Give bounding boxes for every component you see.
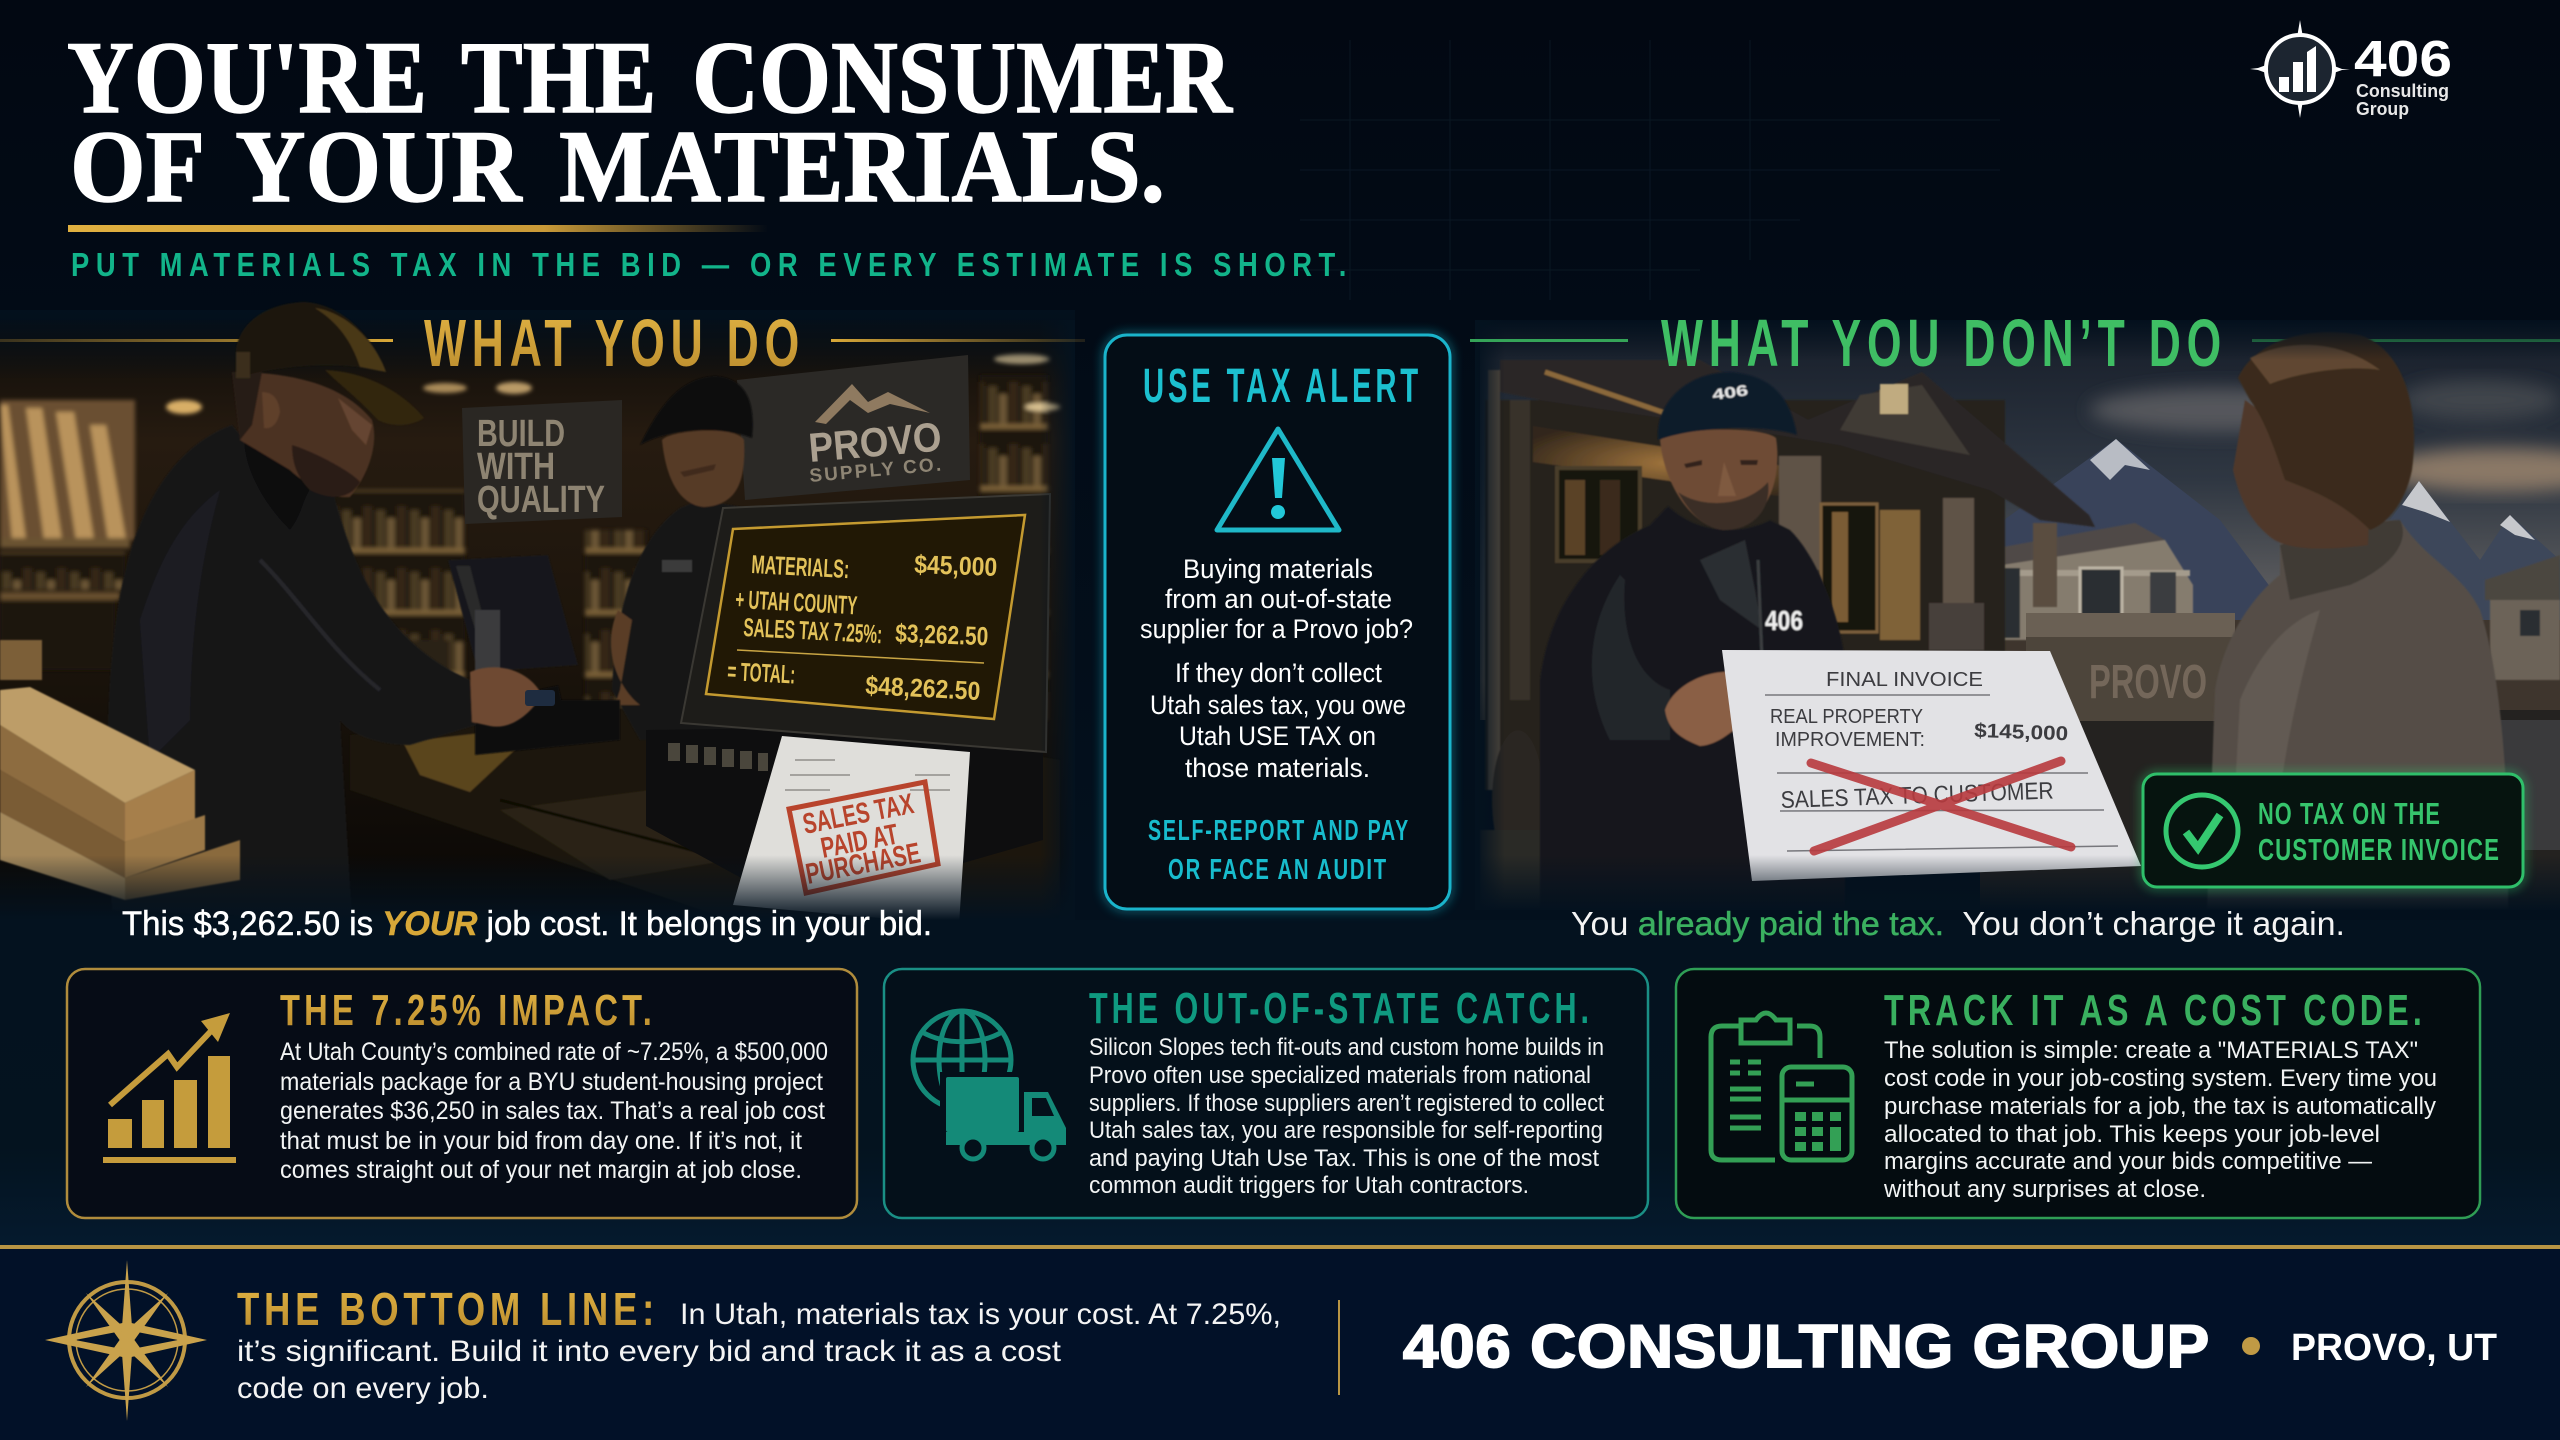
title: YOU'RE THE CONSUMER [67, 21, 1233, 135]
photo edge fades [1475, 320, 2560, 910]
sign: build with quality: BUILD [477, 413, 565, 455]
icon: gold compass [45, 1260, 207, 1421]
final invoice sheet: $145,000 [1974, 720, 2069, 745]
receipt with stamp [733, 736, 970, 925]
top fade and section rule behind figures [0, 320, 1058, 366]
panel: the out-of-state catch: THE OUT-OF-STATE CATCH. [1089, 984, 1593, 1033]
pos monitor with sales tax total: $3,262.50 [895, 618, 989, 651]
sign: provo supply co.: SUPPLY CO. [809, 455, 942, 487]
title: OF YOUR MATERIALS. [70, 110, 1165, 224]
alert body text: If they don’t collect [1175, 658, 1382, 688]
pos monitor with sales tax total: $48,262.50 [865, 670, 981, 706]
receipt with stamp: PAID AT [818, 819, 901, 865]
pos monitor with sales tax total: = TOTAL: [727, 656, 796, 690]
alert heading: USE TAX ALERT [1143, 360, 1422, 413]
red strike-through X [1811, 761, 2071, 851]
callout: no tax on the customer invoice [2143, 774, 2523, 887]
counter [350, 708, 1056, 889]
customer seen from behind [2207, 332, 2508, 910]
footer band [0, 1245, 2560, 1440]
receipt with stamp: SALES TAX [800, 788, 917, 841]
panel: use tax alert [1105, 335, 1450, 909]
logo: 406 Consulting Group [2250, 20, 2452, 119]
alert body text: Utah sales tax, you owe [1150, 690, 1406, 720]
section rule behind customer [2252, 339, 2560, 342]
bottom line text [237, 1283, 1281, 1405]
sign: build with quality: WITH [477, 446, 555, 488]
final invoice sheet: REAL PROPERTY [1770, 706, 1923, 728]
panel: the 7.25% impact: THE 7.25% IMPACT. [280, 986, 656, 1035]
final invoice sheet: IMPROVEMENT: [1775, 729, 1925, 751]
final invoice sheet [1722, 650, 2141, 881]
body text: common audit triggers for Utah contractors. [1089, 1172, 1529, 1199]
caption: what you don't do: You already paid the tax. You don’t charge it again. [1571, 905, 2345, 942]
logo: 406 Consulting Group: 406 [2354, 30, 2452, 87]
panel: track it as a cost code [1676, 969, 2480, 1218]
logo: 406 Consulting Group: Consulting [2356, 81, 2449, 101]
body text: that must be in your bid from day one. If it’s not, it [280, 1127, 802, 1155]
bottom line text: In Utah, materials tax is your cost. At 7.25%, [680, 1298, 1281, 1331]
panel: what you don't do (home delivery photo illustration) [1475, 320, 2560, 910]
cashier [610, 376, 754, 740]
body text: comes straight out of your net margin at job close. [280, 1156, 802, 1184]
contractor handing over invoice [1540, 372, 1845, 910]
body text: generates $36,250 in sales tax. That’s a real job cost [280, 1097, 825, 1125]
body text [1883, 1037, 2437, 1203]
body text: cost code in your job-costing system. Every time you [1884, 1065, 2437, 1092]
body text [1089, 1034, 1604, 1199]
alert call to action: OR FACE AN AUDIT [1168, 854, 1388, 886]
title [67, 21, 1233, 224]
gold rule under title [68, 225, 768, 232]
bottom line text: THE BOTTOM LINE: [237, 1283, 659, 1335]
alert body text: supplier for a Provo job? [1140, 614, 1413, 644]
body text: purchase materials for a job, the tax is automatically [1884, 1093, 2436, 1120]
body text: The solution is simple: create a "MATERIALS TAX" [1884, 1037, 2418, 1064]
body text: and paying Utah Use Tax. This is one of the most [1089, 1145, 1599, 1172]
alert body text: Utah USE TAX on [1179, 721, 1376, 751]
sign: build with quality [462, 400, 622, 524]
callout: no tax on the customer invoice: NO TAX ON THE [2258, 796, 2441, 831]
photo edge fades [0, 320, 1075, 920]
card reader [525, 690, 555, 706]
location: PROVO, UT [2291, 1327, 2497, 1369]
panel: the out-of-state catch [884, 969, 1648, 1218]
body text: Provo often use specialized materials from national [1089, 1062, 1591, 1089]
logo: 406 Consulting Group: Group [2356, 99, 2409, 119]
craftsman house with lit porch [1480, 360, 2095, 910]
sign: build with quality: QUALITY [477, 479, 605, 521]
pos monitor with sales tax total [646, 494, 1050, 910]
bottom line text: it’s significant. Build it into every bid and track it as a cost [237, 1335, 1062, 1368]
bottom line text: code on every job. [237, 1372, 489, 1405]
body text: suppliers. If those suppliers aren’t registered to collect [1089, 1090, 1604, 1117]
pos monitor with sales tax total: + UTAH COUNTY [735, 584, 858, 620]
sky and mountains [1480, 320, 2560, 910]
final invoice sheet: SALES TAX TO CUSTOMER [1780, 777, 2054, 814]
pos monitor with sales tax total: SALES TAX 7.25%: [743, 612, 883, 649]
alert body text [1140, 554, 1413, 783]
receipt with stamp: PURCHASE [803, 837, 923, 891]
neighbouring homes [1970, 523, 2560, 680]
alert call to action: SELF-REPORT AND PAY [1148, 815, 1410, 847]
alert call to action [1148, 815, 1410, 886]
body text: margins accurate and your bids competitive — [1884, 1148, 2372, 1175]
sign: provo supply co.: PROVO [807, 414, 943, 471]
icon: globe and truck [913, 1011, 1066, 1159]
contractor handing over invoice: 406 [1711, 382, 1749, 404]
body text: without any surprises at close. [1883, 1176, 2206, 1203]
body text [280, 1038, 828, 1184]
company name: 406 CONSULTING GROUP [1403, 1313, 2210, 1380]
customer contractor [108, 302, 542, 920]
provo monument sign: PROVO [2089, 656, 2207, 709]
body text: Silicon Slopes tech fit-outs and custom home builds in [1089, 1034, 1604, 1061]
pos monitor with sales tax total: $45,000 [914, 549, 998, 582]
provo monument sign [2026, 613, 2235, 721]
icon: check circle [2166, 795, 2238, 867]
body text: At Utah County’s combined rate of ~7.25%, a $500,000 [280, 1038, 828, 1066]
icon: rising bar chart [103, 1013, 236, 1163]
heading: what you do: WHAT YOU DO [424, 306, 805, 381]
final invoice sheet: FINAL INVOICE [1826, 669, 1983, 691]
caption: what you do: This $3,262.50 is YOUR job cost. It belongs in your bid. [122, 905, 932, 943]
icon: warning triangle [1217, 429, 1339, 530]
heading: what you don't do: WHAT YOU DON’T DO [1661, 306, 2227, 381]
heading: what you don't do [1470, 306, 2227, 381]
alert body text: Buying materials [1183, 554, 1373, 584]
panel: what you do (store photo illustration) [0, 302, 1075, 930]
store background [0, 320, 1075, 920]
alert body text: from an out-of-state [1165, 584, 1392, 614]
sign: provo supply co. [737, 355, 970, 500]
icon: clipboard and calculator [1711, 1013, 1852, 1160]
panel: the 7.25% impact [67, 969, 857, 1218]
contractor handing over invoice: 406 [1765, 605, 1803, 636]
small pos terminal [448, 555, 620, 755]
alert body text: those materials. [1185, 753, 1370, 783]
body text: materials package for a BYU student-housing project [280, 1068, 823, 1096]
body text: Utah sales tax, you are responsible for self-reporting [1089, 1117, 1603, 1144]
pos monitor with sales tax total: MATERIALS: [751, 549, 850, 584]
lumber stack [0, 640, 240, 900]
subtitle: PUT MATERIALS TAX IN THE BID — OR EVERY ESTIMATE IS SHORT. [71, 246, 1353, 283]
body text: allocated to that job. This keeps your job-level [1884, 1121, 2380, 1148]
